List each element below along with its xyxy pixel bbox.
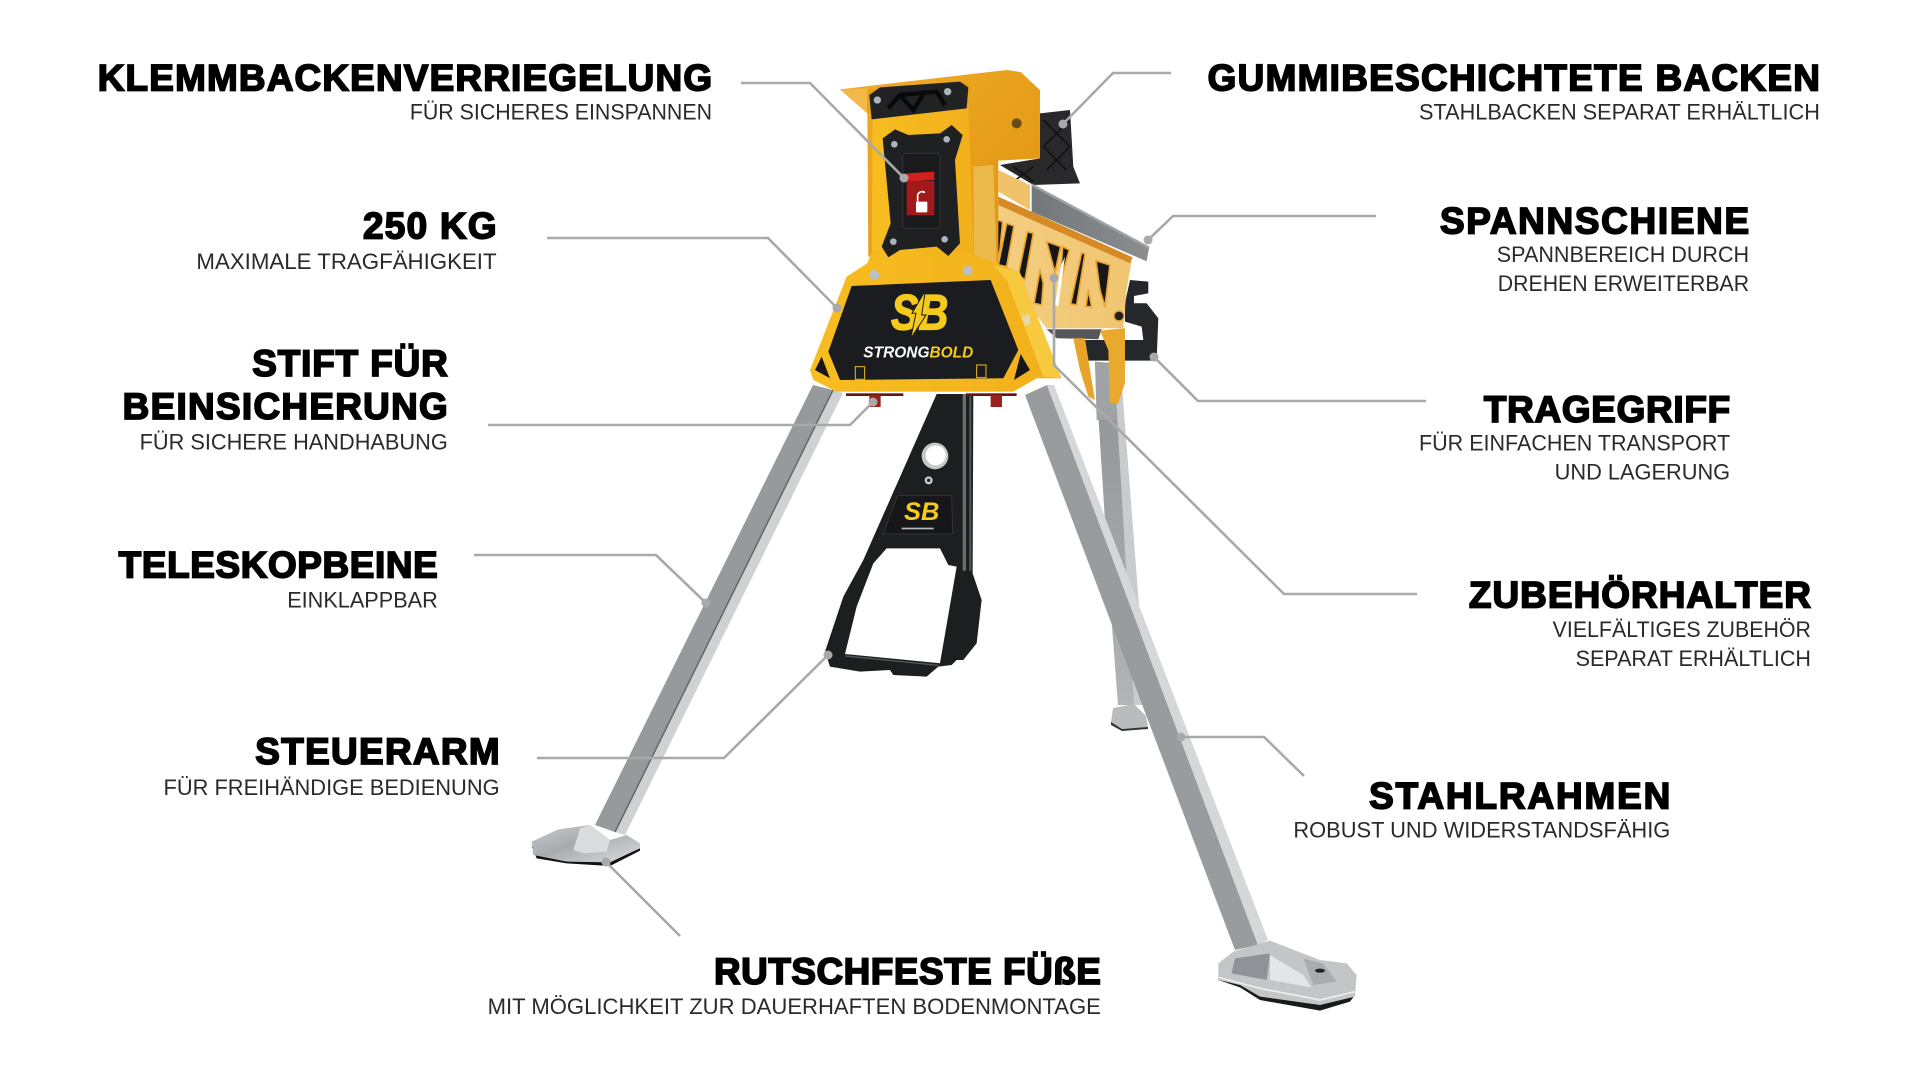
label: 250 kg	[196, 205, 497, 274]
callout line: 250 kg	[547, 238, 842, 312]
brand logo: SB	[891, 284, 948, 340]
beam	[997, 197, 1133, 420]
base housing	[810, 250, 1062, 392]
label: stift fuer beinsicherung: BEINSICHERUNG	[123, 386, 448, 427]
jaw: rubber coated	[1000, 110, 1080, 185]
label: spannschiene: DREHEN ERWEITERBAR	[1498, 271, 1749, 296]
callout line: zubehoerhalter	[1050, 274, 1417, 594]
label: gummibeschichtete backen: STAHLBACKEN SEPARAT ERHÄLTLICH	[1419, 100, 1820, 125]
label: zubehoerhalter: ZUBEHÖRHALTER	[1469, 574, 1811, 615]
back leg	[1095, 363, 1148, 731]
label: rutschfeste fuesse: MIT MÖGLICHKEIT ZUR DAUERHAFTEN BODENMONTAGE	[488, 994, 1101, 1019]
product: clamping workbench	[532, 70, 1357, 1011]
label: teleskopbeine	[119, 544, 438, 612]
label: spannschiene: SPANNSCHIENE	[1440, 200, 1749, 241]
label: steuerarm: FÜR FREIHÄNDIGE BEDIENUNG	[164, 775, 500, 800]
callout line: stift	[488, 398, 878, 425]
label: stift fuer beinsicherung: STIFT FÜR	[252, 343, 448, 384]
callout line: rutschfeste fuesse	[602, 858, 680, 936]
label: teleskopbeine: EINKLAPPBAR	[287, 587, 438, 612]
top plate and column	[840, 70, 1040, 263]
label: steuerarm	[164, 731, 500, 800]
label: zubehoerhalter: SEPARAT ERHÄLTLICH	[1576, 646, 1811, 671]
label: stahlrahmen: ROBUST UND WIDERSTANDSFÄHIG	[1293, 818, 1670, 843]
label: stift fuer beinsicherung	[123, 343, 448, 455]
label: klemmbackenverriegelung: KLEMMBACKENVERRIEGELUNG	[98, 58, 712, 99]
callout line: klemmbackenverriegelung	[741, 83, 908, 182]
right foot	[1218, 941, 1357, 1011]
clamp body	[810, 70, 1158, 420]
label: steuerarm: STEUERARM	[255, 731, 500, 772]
control arm	[825, 394, 982, 677]
right leg	[1025, 385, 1268, 950]
callout line: gummibeschichtete backen	[1058, 73, 1171, 128]
label: zubehoerhalter: VIELFÄLTIGES ZUBEHÖR	[1553, 617, 1811, 642]
callout line: teleskopbeine	[474, 555, 710, 608]
clamping rail	[1032, 183, 1149, 261]
label: tragegriff: FÜR EINFACHEN TRANSPORT	[1419, 431, 1730, 456]
left foot	[532, 825, 640, 866]
text labels	[98, 58, 1820, 1019]
label: zubehoerhalter	[1469, 574, 1811, 671]
label: gummibeschichtete backen: GUMMIBESCHICHTETE BACKEN	[1208, 58, 1820, 99]
jaw lock plate	[882, 125, 963, 257]
label: spannschiene: SPANNBEREICH DURCH	[1497, 242, 1749, 267]
carry handle	[1080, 280, 1158, 361]
label: gummibeschichtete backen	[1208, 58, 1820, 125]
label: stift fuer beinsicherung: FÜR SICHERE HANDHABUNG	[140, 430, 448, 455]
callout line: stahlrahmen	[1176, 732, 1304, 776]
label: klemmbackenverriegelung: FÜR SICHERES EINSPANNEN	[410, 100, 712, 125]
red lock switch	[907, 172, 934, 215]
red leg pins	[846, 393, 1017, 407]
label: rutschfeste fuesse: RUTSCHFESTE FÜßE	[714, 951, 1101, 992]
callout line: spannschiene	[1144, 216, 1376, 244]
label: spannschiene	[1440, 200, 1749, 296]
label: stahlrahmen	[1293, 776, 1670, 843]
control arm: SB	[904, 498, 939, 526]
label: rutschfeste fuesse	[488, 951, 1101, 1019]
brand logo	[863, 284, 973, 361]
upper slide piece	[998, 170, 1030, 210]
label: klemmbackenverriegelung	[98, 58, 712, 125]
brand logo: STRONGBOLD	[863, 344, 973, 361]
label: teleskopbeine: TELESKOPBEINE	[119, 544, 438, 585]
label: tragegriff: UND LAGERUNG	[1555, 460, 1730, 485]
label: 250 kg: 250 KG	[363, 205, 497, 246]
label: tragegriff	[1419, 389, 1730, 485]
left leg	[595, 385, 843, 835]
label: 250 kg: MAXIMALE TRAGFÄHIGKEIT	[196, 249, 497, 274]
callout line: steuerarm	[537, 650, 832, 758]
top grip	[869, 82, 968, 119]
label: stahlrahmen: STAHLRAHMEN	[1369, 776, 1670, 817]
callout line: tragegriff	[1150, 352, 1426, 401]
label: tragegriff: TRAGEGRIFF	[1484, 389, 1730, 430]
